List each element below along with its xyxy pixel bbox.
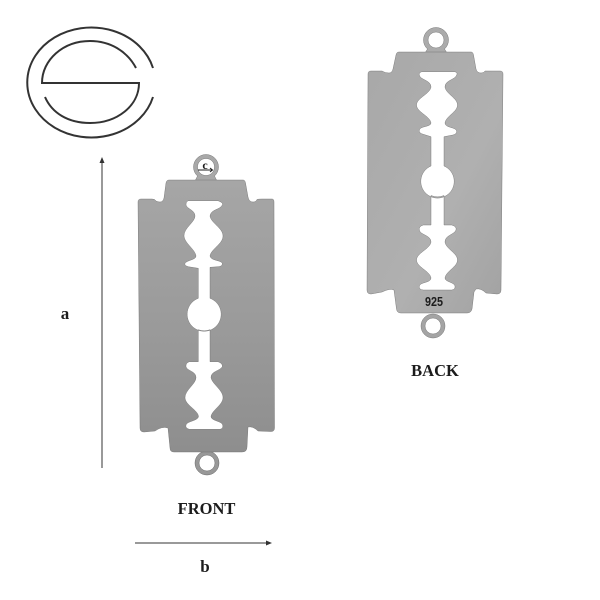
back bottom ring <box>421 314 445 338</box>
label back: BACK <box>411 361 459 380</box>
label front: FRONT <box>178 499 235 518</box>
back top ring <box>424 27 448 53</box>
front ring marking c: c <box>202 158 208 172</box>
back blade <box>367 27 503 338</box>
front blade body with slot <box>138 180 274 452</box>
label a: a <box>61 304 70 323</box>
front ring marking c <box>198 158 212 172</box>
arrow b <box>135 540 272 546</box>
logo <box>27 28 153 138</box>
front bottom ring <box>195 451 219 475</box>
back blade body with slot <box>367 52 503 313</box>
label b: b <box>200 557 210 576</box>
front blade <box>138 154 274 475</box>
arrow a <box>100 157 104 468</box>
925 stamp: 925 <box>425 294 443 309</box>
front top ring <box>194 154 218 181</box>
